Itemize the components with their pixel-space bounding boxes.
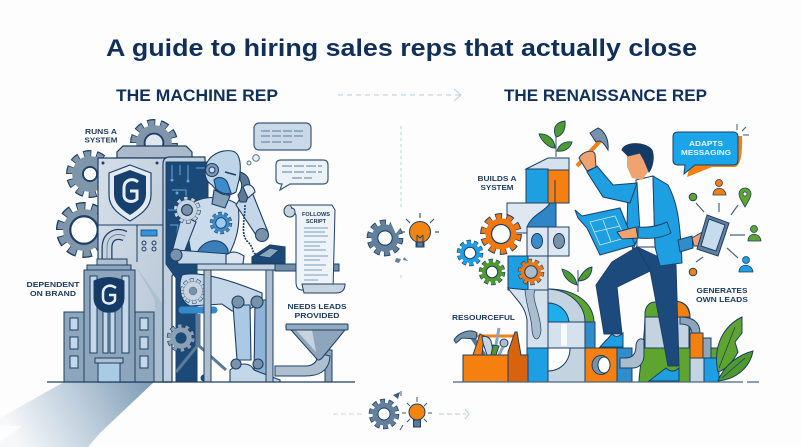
icon: large orange gear bbox=[484, 217, 518, 251]
icon: location pin bbox=[739, 188, 751, 207]
robot near arm bbox=[170, 215, 244, 264]
icon: blue gear bbox=[459, 242, 481, 264]
panel: the renaissance rep illustration bbox=[452, 121, 761, 382]
icon: green person bbox=[748, 226, 761, 241]
label: builds a system bbox=[478, 174, 517, 192]
robot torso bbox=[188, 198, 239, 260]
callout: adapts messaging: ADAPTS bbox=[689, 139, 723, 148]
hair bbox=[622, 144, 653, 172]
label: runs a system bbox=[84, 127, 118, 144]
arrow: machine to renaissance bbox=[338, 89, 461, 101]
icon: green node bbox=[689, 193, 697, 201]
robot neck bbox=[212, 190, 230, 208]
speech bubble: upper bbox=[254, 123, 311, 150]
tablet hand bbox=[692, 231, 707, 246]
label: generates own leads: OWN LEADS bbox=[696, 295, 748, 304]
icon: leaves bbox=[717, 317, 753, 381]
robot phone receiver bbox=[238, 172, 255, 202]
icon: top gear bbox=[135, 124, 173, 162]
label: runs a system: SYSTEM bbox=[84, 136, 118, 144]
icon: mid sprout bbox=[562, 267, 592, 292]
label: resourceful: RESOURCEFUL bbox=[452, 313, 515, 322]
label: follows script bbox=[302, 212, 330, 225]
ground line bbox=[453, 381, 759, 383]
speech bubble: lower bbox=[276, 160, 328, 190]
divider: dashed vertical bbox=[400, 126, 402, 279]
face bbox=[627, 150, 650, 180]
tools bbox=[454, 328, 515, 355]
callout: adapts messaging bbox=[673, 124, 749, 177]
label: follows script: SCRIPT bbox=[306, 219, 327, 225]
icon: blue person bbox=[739, 256, 753, 272]
icon: chest gear bbox=[212, 214, 230, 232]
label: needs leads provided bbox=[288, 302, 346, 320]
icon: building shield bbox=[94, 278, 124, 312]
robot legs bbox=[180, 274, 280, 382]
desk bbox=[197, 264, 339, 382]
icon: orange node bbox=[689, 268, 697, 276]
ground line bbox=[47, 381, 355, 383]
tablet bbox=[697, 215, 729, 256]
icon: small orange gear bbox=[520, 261, 542, 283]
front leg bbox=[637, 247, 679, 366]
machine circuit panel bbox=[163, 157, 210, 382]
label: generates own leads bbox=[696, 286, 748, 304]
label: dependent on brand: DEPENDENT bbox=[26, 280, 80, 289]
cable pipes bbox=[107, 234, 125, 262]
control panel bbox=[141, 230, 157, 251]
callout: adapts messaging: MESSAGING bbox=[681, 148, 731, 157]
icon: bottom gear and bulb bbox=[372, 391, 432, 430]
shirt bbox=[636, 176, 655, 247]
machine base cap bbox=[117, 146, 192, 158]
label: builds a system: SYSTEM bbox=[480, 183, 514, 192]
robot bbox=[170, 151, 285, 382]
icon: green gear bbox=[481, 261, 503, 283]
heading: the renaissance rep: THE RENAISSANCE REP bbox=[504, 87, 707, 105]
funnel bbox=[275, 324, 348, 382]
raised arm bbox=[587, 166, 637, 203]
person bbox=[575, 128, 729, 381]
icon: top sprout bbox=[539, 121, 572, 157]
hammer bbox=[577, 128, 608, 166]
arrow: bottom left dashes bbox=[333, 413, 362, 415]
heading: the machine rep: THE MACHINE REP bbox=[116, 87, 278, 105]
panel: the machine rep illustration bbox=[0, 123, 355, 447]
shoes bbox=[600, 333, 679, 381]
label: runs a system: RUNS A bbox=[85, 127, 118, 136]
blueprint bbox=[575, 208, 635, 255]
icon: orange person bbox=[713, 180, 726, 195]
icon: upper left gear bbox=[71, 155, 109, 193]
label: builds a system: BUILDS A bbox=[478, 174, 517, 183]
title: A guide to hiring sales reps that actually close bbox=[106, 35, 697, 62]
back leg bbox=[596, 247, 652, 334]
thought dots bbox=[247, 155, 259, 165]
robot far arm bbox=[236, 192, 268, 242]
label: needs leads provided: PROVIDED bbox=[294, 311, 340, 320]
tablet sleeve bbox=[678, 236, 693, 252]
building bbox=[64, 259, 154, 382]
jacket bbox=[627, 176, 682, 266]
icon: dark panel gear bbox=[170, 327, 192, 349]
label: dependent on brand bbox=[26, 280, 80, 298]
label: follows script: FOLLOWS bbox=[302, 212, 330, 218]
machine cabinet bbox=[98, 158, 170, 382]
icon: broken gear and bulb, centre bbox=[370, 213, 439, 263]
label: generates own leads: GENERATES bbox=[696, 286, 748, 295]
chair bbox=[176, 310, 226, 382]
script scroll bbox=[284, 205, 345, 293]
box body bbox=[463, 355, 508, 382]
scroll lines bbox=[304, 228, 328, 280]
hand raised bbox=[579, 151, 596, 171]
label: dependent on brand: ON BRAND bbox=[30, 289, 77, 298]
label: needs leads provided: NEEDS LEADS bbox=[288, 302, 346, 311]
building blocks system bbox=[507, 158, 632, 382]
lower right blocks bbox=[620, 301, 719, 382]
robot head bbox=[205, 151, 240, 195]
ground shadow bbox=[0, 382, 154, 447]
desk phone bbox=[252, 245, 285, 263]
icon: cabinet shield bbox=[109, 165, 151, 221]
toolbox bbox=[454, 328, 528, 382]
forearm with blueprint hand bbox=[638, 222, 671, 238]
icon: lower left gear bbox=[61, 207, 107, 253]
icon: hip gear bbox=[183, 281, 203, 301]
network lines bbox=[696, 203, 745, 262]
icon: shoulder gear bbox=[176, 199, 198, 221]
arrow: bottom right bbox=[439, 409, 469, 419]
